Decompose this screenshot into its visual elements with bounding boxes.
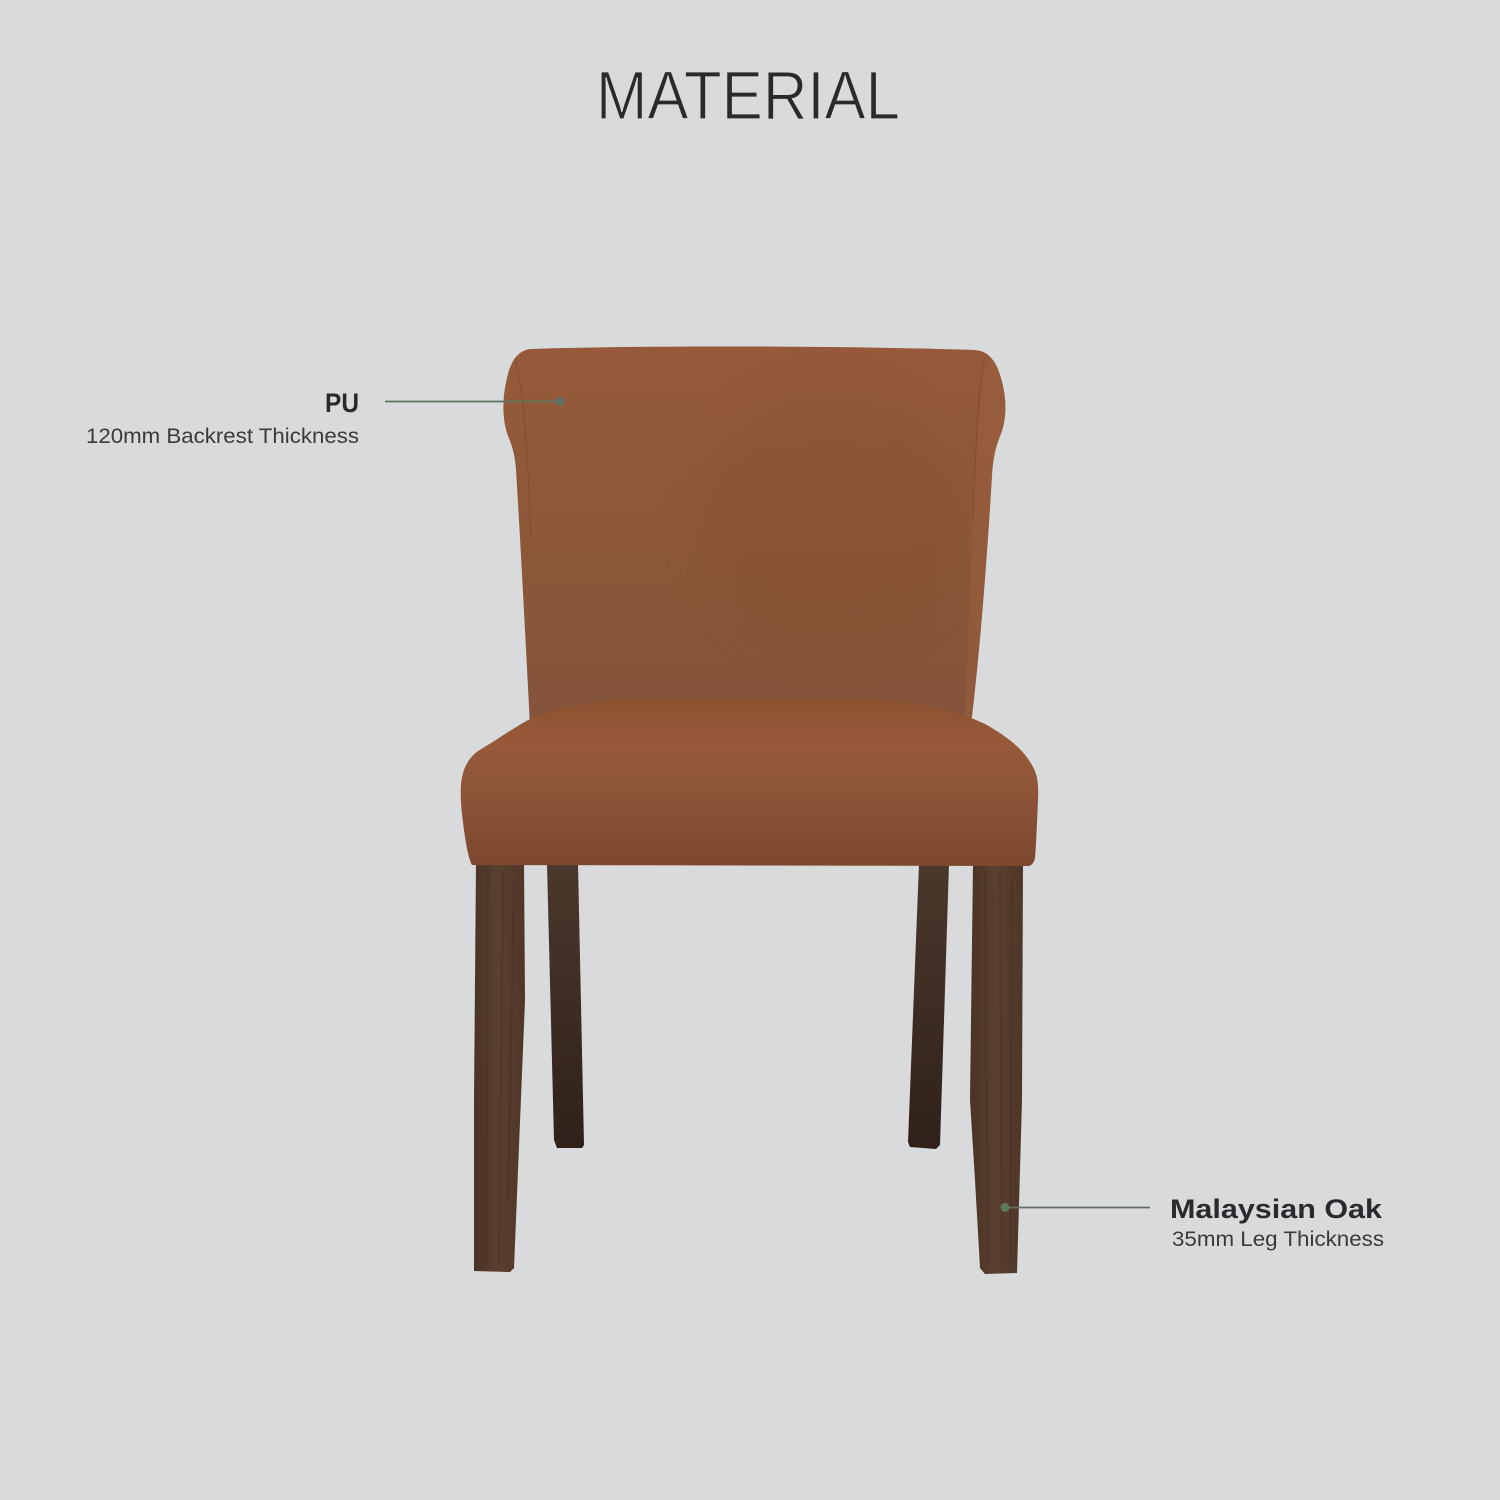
callout heading: PU: PU [325,388,359,418]
leader line: PU [385,397,564,406]
callout heading: Malaysian Oak: Malaysian Oak [1170,1194,1383,1224]
callout: Malaysian Oak [1000,1194,1384,1251]
seat cushion [461,698,1038,866]
chair illustration [461,346,1038,1274]
title: MATERIAL [596,57,900,134]
callout detail: backrest thickness: 120mm Backrest Thickness [86,425,359,448]
backrest [503,346,1010,725]
back-right leg [908,864,949,1149]
front-left leg [474,864,525,1272]
front-right leg [970,864,1023,1274]
callout detail: leg thickness: 35mm Leg Thickness [1172,1228,1384,1251]
leader line: Malaysian Oak [1000,1203,1150,1212]
callout: PU [86,388,564,448]
back-left leg [547,864,584,1148]
